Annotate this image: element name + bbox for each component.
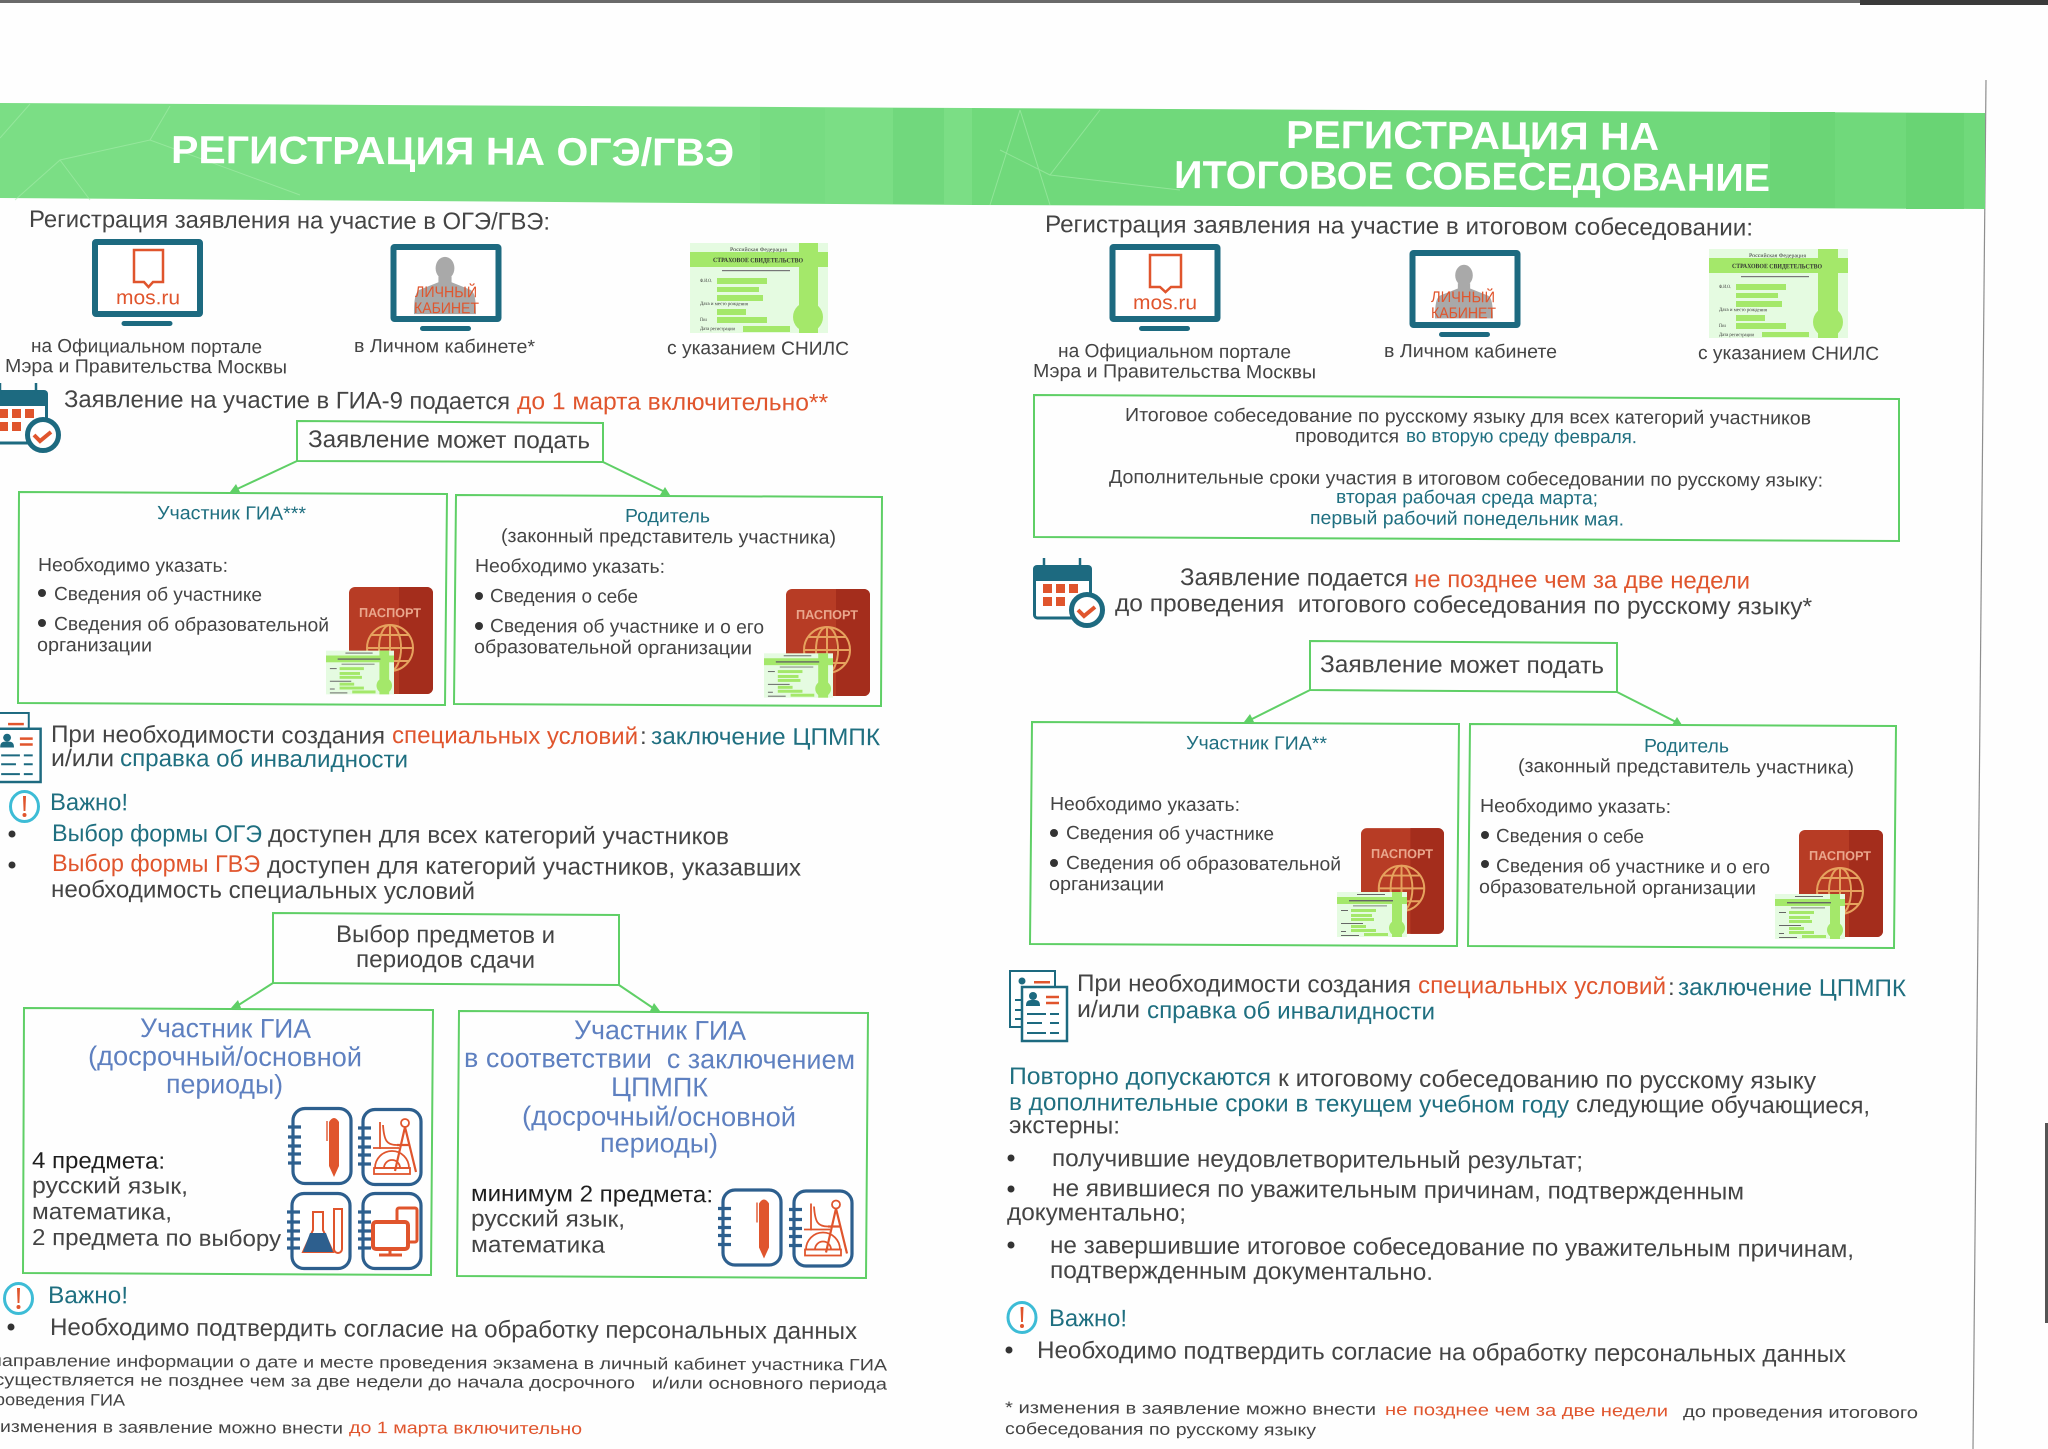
icon: SNILS card right: Пол <box>1719 324 1726 329</box>
footnote right: собеседования по русскому языку <box>1005 1420 1317 1440</box>
panel: participant left: Необходимо указать: <box>38 555 228 577</box>
icon: SNILS card right: Ф.И.О. <box>1719 285 1731 290</box>
panel: participant left: Сведения об образовательной <box>54 614 329 636</box>
heading: right banner title <box>1174 114 1770 200</box>
box: who can apply left <box>297 421 603 462</box>
special conditions right: справка об инвалидности <box>1147 997 1435 1025</box>
panel: participant left <box>18 492 447 705</box>
icon: subject chemistry <box>287 1194 350 1268</box>
icon: SNILS card: СТРАХОВОЕ СВИДЕТЕЛЬСТВО <box>713 257 803 264</box>
right page <box>1005 211 1918 1440</box>
box: who can apply right <box>1310 641 1617 692</box>
footnotes left: осуществляется не позднее чем за две недели до начала досрочного и/или основного периода <box>0 1371 888 1394</box>
icon: subject math <box>358 1110 421 1184</box>
panel: parent left: (законный представитель участника) <box>501 526 836 549</box>
icon: important left 2 <box>4 1284 32 1314</box>
icon: calendar left <box>0 383 58 450</box>
icon: personal account monitor right: КАБИНЕТ <box>1431 305 1497 322</box>
panel: parent right <box>1468 724 1896 948</box>
icon: subject russian B <box>718 1190 781 1265</box>
caption: portal right <box>1033 341 1316 383</box>
box: subjects choice <box>273 913 619 985</box>
panel: participant left: организации <box>37 635 152 657</box>
panel: participant right: Сведения об участнике <box>1066 823 1274 845</box>
icon: mos.ru monitor right <box>1112 247 1218 331</box>
icon: personal account monitor: ЛИЧНЫЙ <box>415 283 477 301</box>
panel: participant with CPMPK: (досрочный/основной <box>522 1101 796 1132</box>
panel: parent left: Сведения об участнике и о его <box>490 616 764 638</box>
footnote right <box>1005 1399 1918 1440</box>
icon: SNILS card: Ф.И.О. <box>700 279 712 284</box>
icon: passport right <box>1337 828 1444 937</box>
icon: SNILS card: Российская Федерация <box>730 246 788 253</box>
text block: retake: следующие обучающиеся, <box>1576 1091 1870 1119</box>
special conditions left: специальных условий <box>392 722 638 750</box>
panel: participant main periods: (досрочный/основной <box>88 1041 362 1072</box>
panel: interview dates: вторая рабочая среда марта; <box>1336 487 1598 509</box>
panel: parent right: (законный представитель участника) <box>1518 756 1854 779</box>
deadline right <box>1115 564 1812 621</box>
special conditions left <box>51 721 880 773</box>
panel: participant left: Участник ГИА*** <box>157 503 307 525</box>
panel: participant main periods: 2 предмета по выбору <box>32 1224 282 1251</box>
caption: personal account right: в Личном кабинете <box>1384 341 1557 363</box>
panel: participant right: Сведения об образовательной <box>1066 853 1341 875</box>
footnote right: не позднее чем за две недели <box>1385 1401 1668 1420</box>
scan edge: top <box>0 0 2048 5</box>
panel: parent right: Сведения об участнике и о его <box>1496 856 1770 878</box>
footnotes left: изменения в заявление можно внести <box>0 1418 343 1438</box>
panel: participant with CPMPK: периоды) <box>600 1128 718 1159</box>
icon: passport left parent: ПАСПОРТ <box>796 607 858 622</box>
heading: right banner title: ИТОГОВОЕ СОБЕСЕДОВАНИЕ <box>1174 154 1770 200</box>
arrow: to participant right <box>1244 690 1310 722</box>
panel: interview dates: во вторую среду февраля. <box>1406 426 1637 448</box>
icon: passport left <box>326 587 433 694</box>
icon: personal account monitor <box>394 247 498 331</box>
panel: parent left: Родитель <box>625 506 710 527</box>
icon: passport right parent: ПАСПОРТ <box>1809 848 1871 863</box>
box: subjects choice: Выбор предметов и <box>336 921 555 949</box>
caption: portal right: Мэра и Правительства Москвы <box>1033 361 1316 383</box>
arrow: to panel A <box>231 983 273 1008</box>
panel: interview dates: проводится <box>1295 426 1399 448</box>
icon: SNILS card: Дата регистрации <box>700 327 735 332</box>
panel: participant main periods: математика, <box>32 1198 172 1225</box>
panel: participant left: Сведения об участнике <box>54 584 262 606</box>
heading: left banner title: РЕГИСТРАЦИЯ НА ОГЭ/ГВЭ <box>171 129 734 175</box>
special conditions right: и/или <box>1077 996 1140 1023</box>
panel: participant right: Необходимо указать: <box>1050 794 1240 816</box>
footnotes left: направление информации о дате и месте проведения экзамена в личный кабинет участника ГИА <box>0 1352 887 1375</box>
special conditions left: справка об инвалидности <box>120 745 408 773</box>
arrow: to participant left <box>230 461 297 492</box>
text block: retake: документально; <box>1007 1199 1186 1227</box>
list: form choice: Выбор формы ОГЭ <box>52 820 262 848</box>
caption: personal account: в Личном кабинете* <box>354 336 536 358</box>
footnotes left: до 1 марта включительно <box>349 1419 582 1438</box>
deadline right: Заявление подается <box>1180 564 1408 592</box>
icon: SNILS card: Дата и место рождения <box>700 302 749 307</box>
caption: portal: Мэра и Правительства Москвы <box>5 356 287 378</box>
footnotes left <box>0 1352 888 1438</box>
list: consent left: Необходимо подтвердить согласие на обработку персональных данных <box>50 1314 857 1345</box>
list: form choice: необходимость специальных условий <box>51 876 475 905</box>
special conditions right <box>1077 970 1906 1025</box>
text block: retake: подтвержденным документально. <box>1050 1257 1433 1286</box>
list: form choice <box>8 820 801 905</box>
arrow: to panel B <box>619 985 660 1011</box>
panel: interview dates: Дополнительные сроки участия в итоговом собеседовании по русскому языку: <box>1109 467 1823 492</box>
caption: SNILS right: с указанием СНИЛС <box>1698 343 1879 365</box>
deadline right: не позднее чем за две недели <box>1414 566 1750 595</box>
deadline right: до проведения итогового собеседования по русскому языку* <box>1115 590 1812 621</box>
icon: personal account monitor right <box>1412 253 1518 337</box>
box: who can apply left: Заявление может подать <box>308 426 590 454</box>
box: who can apply right: Заявление может подать <box>1320 651 1604 679</box>
icon: SNILS card: Пол <box>700 318 707 323</box>
icon: personal account monitor: КАБИНЕТ <box>414 300 480 317</box>
panel: participant with CPMPK: ЦПМПК <box>611 1072 708 1102</box>
panel: participant main periods: русский язык, <box>32 1172 188 1199</box>
arrow: to parent right <box>1617 692 1682 725</box>
scan edge: right page lines <box>1973 80 2048 1449</box>
panel: parent right: Родитель <box>1644 736 1729 757</box>
icon: important left 1 <box>10 792 38 822</box>
panel: participant main periods: Участник ГИА <box>140 1013 311 1044</box>
panel: participant with CPMPK: в соответствии с заключением <box>464 1043 855 1075</box>
icon: passport right parent <box>1775 830 1883 939</box>
special conditions left: и/или <box>51 745 114 772</box>
icon: subject russian <box>288 1108 351 1184</box>
panel: participant with CPMPK: Участник ГИА <box>574 1015 746 1046</box>
panel: participant with CPMPK: минимум 2 предмета: <box>471 1180 713 1207</box>
footnote right: * изменения в заявление можно внести <box>1005 1399 1376 1419</box>
special conditions left: : <box>640 723 647 750</box>
panel: parent left: Сведения о себе <box>490 586 638 608</box>
special conditions right: При необходимости создания <box>1077 970 1411 999</box>
panel: parent left: образовательной организации <box>474 637 752 659</box>
list: consent right: Необходимо подтвердить согласие на обработку персональных данных <box>1037 1337 1846 1368</box>
panel: parent right: Необходимо указать: <box>1480 796 1671 818</box>
text block: retake: получившие неудовлетворительный результат; <box>1052 1145 1583 1175</box>
icon: subject computer <box>358 1194 421 1268</box>
deadline line left: Заявление на участие в ГИА-9 подается <box>64 386 510 415</box>
text block: retake: не явившиеся по уважительным причинам, подтвержденным <box>1052 1175 1744 1206</box>
icon: SNILS card <box>690 243 828 333</box>
caption: portal <box>5 336 287 378</box>
deadline line left <box>64 386 828 417</box>
icon: documents left <box>0 713 41 782</box>
icon: SNILS card right: Дата и место рождения <box>1719 308 1768 313</box>
panel: participant right <box>1030 722 1459 946</box>
icon: subject math B <box>789 1191 852 1266</box>
caption: portal right: на Официальном портале <box>1058 341 1291 363</box>
icon: passport left: ПАСПОРТ <box>359 605 421 620</box>
special conditions left: При необходимости создания <box>51 721 385 750</box>
icon: mos.ru monitor right: mos.ru <box>1133 292 1197 314</box>
panel: participant main periods: периоды) <box>166 1069 283 1100</box>
caption: SNILS: с указанием СНИЛС <box>667 338 849 360</box>
banner: left page <box>0 103 972 205</box>
icon: mos.ru monitor <box>95 242 200 326</box>
panel: interview dates: первый рабочий понедельник мая. <box>1310 508 1624 531</box>
special conditions right: специальных условий <box>1418 972 1666 1000</box>
special conditions left: заключение ЦПМПК <box>651 723 880 751</box>
panel: interview dates <box>1034 395 1899 541</box>
icon: personal account monitor right: ЛИЧНЫЙ <box>1431 288 1495 306</box>
heading: right banner title: РЕГИСТРАЦИЯ НА <box>1286 114 1659 159</box>
panel: participant main periods: 4 предмета: <box>32 1147 165 1174</box>
icon: SNILS card right: Российская Федерация <box>1749 252 1807 259</box>
text block: retake: Повторно допускаются <box>1009 1063 1271 1091</box>
icon: passport right: ПАСПОРТ <box>1371 846 1433 861</box>
icon: SNILS card right: Дата регистрации <box>1719 333 1754 338</box>
icon: SNILS card right <box>1709 249 1848 338</box>
icon: mos.ru monitor: mos.ru <box>116 287 180 309</box>
arrow: to parent left <box>603 462 670 495</box>
icon: passport left parent <box>764 589 870 698</box>
panel: parent right: Сведения о себе <box>1496 826 1644 848</box>
special conditions right: заключение ЦПМПК <box>1678 974 1906 1002</box>
panel: parent left: Необходимо указать: <box>475 556 665 578</box>
list: form choice: доступен для категорий участников, указавших <box>267 852 801 882</box>
icon: SNILS card right: СТРАХОВОЕ СВИДЕТЕЛЬСТВО <box>1732 263 1822 270</box>
heading: registration left: Регистрация заявления на участие в ОГЭ/ГВЭ: <box>29 206 550 236</box>
caption: portal: на Официальном портале <box>31 336 262 358</box>
icon: calendar right <box>1033 558 1102 626</box>
icon: important right <box>1008 1302 1036 1332</box>
panel: participant with CPMPK: математика <box>471 1231 605 1258</box>
panel: participant right: организации <box>1049 874 1164 896</box>
icon: documents right <box>1010 971 1067 1041</box>
heading: important left 2: Важно! <box>48 1282 128 1309</box>
text block: retake <box>1007 1063 1870 1286</box>
panel: interview dates: Итоговое собеседование по русскому языку для всех категорий участников <box>1125 405 1811 429</box>
list: form choice: доступен для всех категорий участников <box>268 821 729 850</box>
panel: participant with CPMPK: русский язык, <box>471 1205 625 1232</box>
text block: retake: в дополнительные сроки в текущем учебном году <box>1009 1089 1569 1119</box>
panel: participant main periods <box>23 1008 433 1275</box>
heading: important right: Важно! <box>1049 1305 1127 1332</box>
list: form choice: Выбор формы ГВЭ <box>52 850 260 878</box>
special conditions right: : <box>1668 974 1675 1001</box>
panel: parent left <box>454 495 882 706</box>
left page <box>0 206 888 1438</box>
deadline line left: до 1 марта включительно** <box>517 388 828 417</box>
text block: retake: не завершившие итоговое собеседование по уважительным причинам, <box>1050 1232 1854 1263</box>
panel: parent right: образовательной организации <box>1479 877 1756 899</box>
banner: right page <box>972 108 1985 209</box>
panel: participant with CPMPK <box>457 1011 868 1278</box>
heading: important left 1: Важно! <box>50 789 128 816</box>
heading: registration right: Регистрация заявления на участие в итоговом собеседовании: <box>1045 211 1753 242</box>
box: subjects choice: периодов сдачи <box>356 946 535 974</box>
text block: retake: к итоговому собеседованию по русскому языку <box>1278 1065 1816 1095</box>
panel: participant right: Участник ГИА** <box>1186 733 1328 755</box>
footnote right: до проведения итогового <box>1683 1403 1918 1422</box>
text block: retake: экстерны: <box>1009 1112 1120 1140</box>
